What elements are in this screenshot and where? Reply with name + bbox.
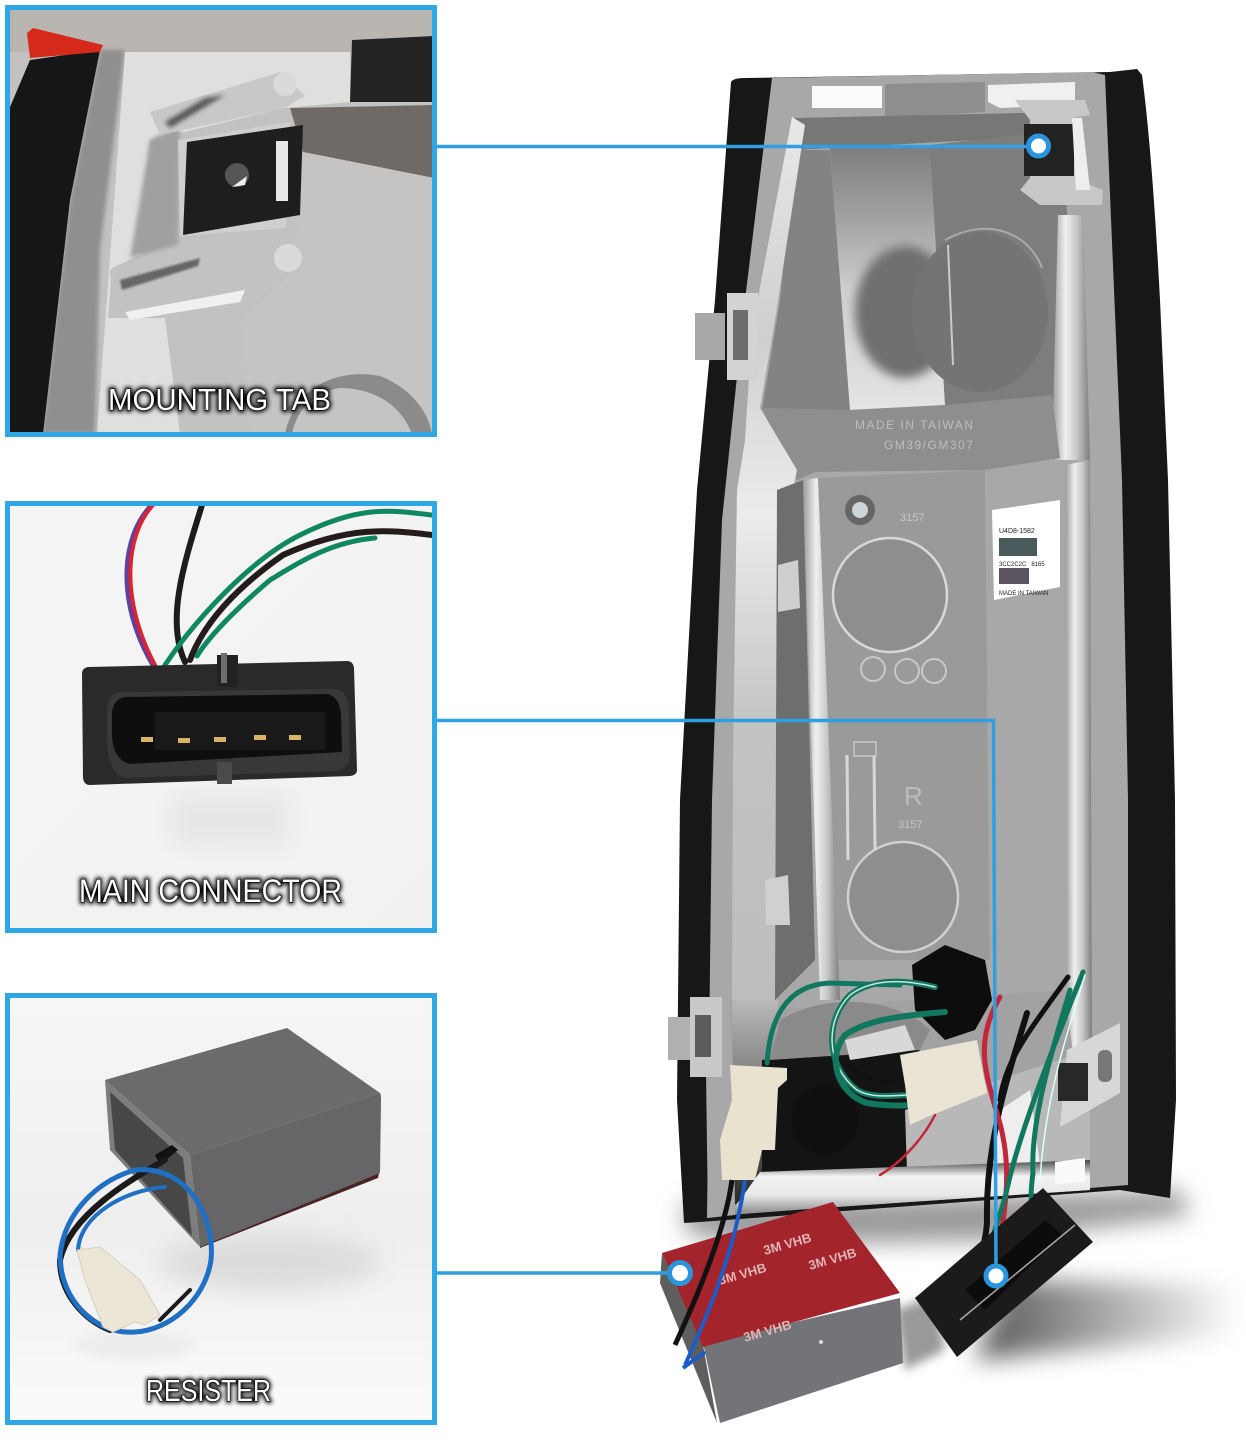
connector line: resister — [437, 1262, 690, 1284]
label: mounting tab: MOUNTING TAB — [108, 382, 331, 417]
embossed text: GM39/GM307 — [884, 438, 974, 452]
wires to socket — [880, 972, 1085, 1280]
ground shadow — [680, 1190, 1240, 1370]
black taped wire bundle — [912, 945, 992, 1040]
label: resister: RESISTER — [146, 1373, 271, 1408]
lamp lower panels: 3157 — [898, 819, 922, 831]
lamp top tabs — [795, 82, 1075, 150]
resister box — [105, 1028, 381, 1248]
label: main connector: MAIN CONNECTOR — [79, 873, 342, 909]
3M resister box: 3M VHB — [717, 1260, 768, 1288]
black socket module — [915, 1188, 1093, 1357]
embossed text — [855, 418, 974, 452]
lamp lower panels: 3157 — [900, 512, 924, 524]
white plug connector — [720, 1065, 787, 1180]
wires: main connector — [127, 505, 432, 665]
barcode sticker: 3CC2C2C 8165 — [999, 562, 1045, 568]
lamp lower panels — [765, 460, 1092, 1050]
mounting tab on lamp — [1015, 100, 1103, 205]
barcode sticker: U4D8-1582 — [999, 528, 1035, 535]
lamp chrome left rail — [732, 117, 805, 1000]
label: mounting tab: MOUNTING TAB — [108, 382, 331, 417]
panel: mounting tab close-up — [8, 8, 434, 434]
3M resister box: 3M VHB — [807, 1245, 858, 1273]
lamp lower panels: R — [904, 781, 923, 811]
label: resister: RESISTER — [146, 1373, 271, 1408]
embossed text: MADE IN TAIWAN — [855, 418, 974, 432]
wires: resister loop — [60, 1160, 211, 1332]
label: main connector: MAIN CONNECTOR — [79, 873, 342, 909]
lower left clip — [668, 997, 722, 1077]
lamp wiring cavity — [705, 990, 1120, 1218]
3M resister box: 3M VHB — [742, 1317, 793, 1345]
connector line: mounting tab — [437, 136, 1048, 156]
lamp silver housing — [707, 72, 1128, 1218]
white plug — [77, 1247, 160, 1332]
connector line: main connector — [437, 720, 1006, 1286]
green wire loops — [767, 982, 945, 1106]
3M resister box: 3M VHB — [762, 1230, 813, 1258]
3M resister box — [660, 1180, 903, 1423]
main connector body — [82, 653, 357, 785]
panel: main connector close-up — [8, 504, 434, 930]
lamp black gasket — [677, 69, 1176, 1223]
barcode sticker — [992, 500, 1060, 600]
lamp upper recess — [762, 130, 1090, 480]
barcode sticker: MADE IN TAIWAN — [999, 591, 1048, 597]
double white connector — [900, 1040, 987, 1125]
panel: resister close-up — [8, 996, 434, 1422]
product photo: tail lamp rear — [660, 69, 1240, 1423]
upper left clip — [695, 293, 758, 380]
